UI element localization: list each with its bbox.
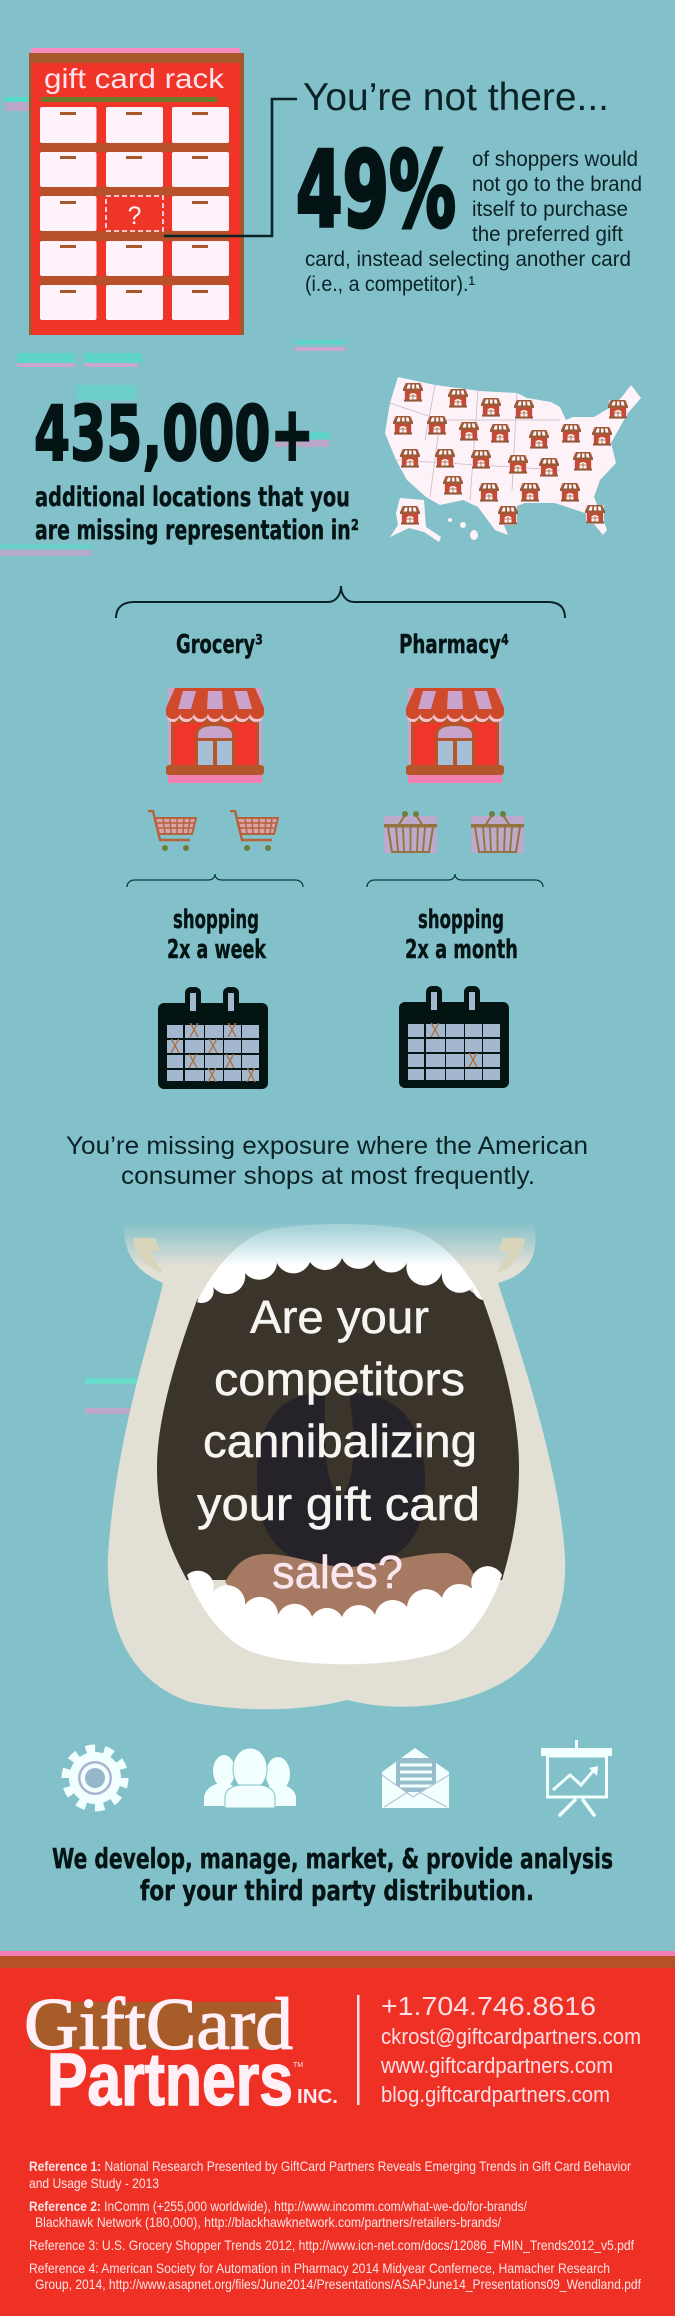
heading: you're not there: You’re not there... bbox=[303, 76, 609, 119]
references: Blackhawk Network (180,000), http://blackhawknetwork.com/partners/retailers-brands/ bbox=[35, 2214, 501, 2230]
text block: additional locations: are missing representation in² bbox=[35, 515, 359, 546]
icon: weekly calendar: X bbox=[246, 1065, 256, 1087]
text: shopping 2x a month: shopping bbox=[418, 905, 504, 935]
headline: cannibalizing question: cannibalizing bbox=[203, 1415, 477, 1467]
text block: shoppers statistic: not go to the brand bbox=[472, 173, 642, 196]
text block: additional locations: additional locations that you bbox=[35, 482, 350, 513]
logo: Partners bbox=[47, 2038, 293, 2121]
bracket: grocery and pharmacy bbox=[116, 586, 565, 618]
text block: shoppers statistic bbox=[305, 148, 642, 296]
bracket: grocery frequency bbox=[127, 874, 303, 887]
logo bbox=[24, 1984, 338, 2121]
panel: footer bbox=[0, 1951, 675, 2316]
text: shopping 2x a week: shopping bbox=[173, 905, 259, 935]
illustration: open mouth bbox=[108, 1222, 565, 1709]
logo: INC. bbox=[297, 2086, 338, 2108]
icon: monthly calendar: X bbox=[468, 1050, 478, 1072]
icon: weekly calendar bbox=[158, 987, 268, 1089]
icon: shopping baskets bbox=[384, 811, 524, 853]
icon: weekly calendar: X bbox=[208, 1036, 218, 1058]
text block: shoppers statistic: the preferred gift bbox=[472, 223, 623, 246]
icon: weekly calendar: X bbox=[189, 1020, 199, 1042]
contact details: ckrost@giftcardpartners.com bbox=[381, 2024, 641, 2049]
references bbox=[29, 2158, 641, 2292]
references: Reference 2: InComm (+255,000 worldwide), http://www.incomm.com/what-we-do/for-brands/ bbox=[29, 2198, 527, 2214]
heading: grocery: Grocery³ bbox=[176, 630, 263, 660]
map: United States with store icons bbox=[385, 377, 641, 542]
icon: weekly calendar: X bbox=[225, 1051, 235, 1073]
stat: 49%: 49% bbox=[296, 129, 456, 251]
text: services bbox=[52, 1842, 613, 1907]
missing card: ? bbox=[128, 202, 141, 230]
text block: shoppers statistic: (i.e., a competitor).¹ bbox=[305, 273, 475, 296]
headline: cannibalizing question: your gift card bbox=[197, 1478, 480, 1530]
icon: shopping carts bbox=[148, 811, 278, 851]
face bbox=[108, 1222, 565, 1709]
stat: 435,000+: 435,000+ bbox=[34, 389, 314, 478]
text: shopping 2x a week: 2x a week bbox=[167, 935, 266, 965]
icon: weekly calendar: X bbox=[227, 1020, 237, 1042]
headline: cannibalizing question: Are your bbox=[250, 1291, 429, 1343]
text block: shoppers statistic: itself to purchase bbox=[472, 198, 628, 221]
contact details: www.giftcardpartners.com bbox=[380, 2053, 613, 2078]
contact details bbox=[380, 1991, 641, 2107]
logo: TM bbox=[293, 2062, 303, 2069]
headline: cannibalizing question: sales? bbox=[272, 1546, 403, 1598]
text: missing exposure: You’re missing exposure where the American bbox=[66, 1132, 588, 1160]
rack cards bbox=[40, 107, 229, 320]
icon: monthly calendar bbox=[399, 986, 509, 1088]
text: missing exposure bbox=[66, 1132, 588, 1190]
icon: envelope bbox=[382, 1748, 449, 1808]
icon: weekly calendar: X bbox=[170, 1036, 180, 1058]
upper teeth bbox=[197, 1224, 483, 1303]
icon: gear bbox=[66, 1749, 124, 1807]
contact details: blog.giftcardpartners.com bbox=[381, 2082, 610, 2107]
text block: shoppers statistic: card, instead selecting another card bbox=[305, 248, 631, 271]
headline: cannibalizing question bbox=[197, 1291, 480, 1598]
text block: additional locations bbox=[35, 482, 359, 546]
references: and Usage Study - 2013 bbox=[29, 2175, 159, 2191]
bracket: pharmacy frequency bbox=[367, 874, 543, 887]
icon: weekly calendar: X bbox=[188, 1051, 198, 1073]
text: missing exposure: consumer shops at most frequently. bbox=[121, 1162, 535, 1190]
missing card bbox=[106, 196, 163, 231]
mouth interior bbox=[157, 1240, 519, 1580]
icon: presentation board bbox=[541, 1740, 612, 1815]
heading: pharmacy: Pharmacy⁴ bbox=[399, 630, 509, 660]
icon: people bbox=[204, 1748, 296, 1808]
tongue bbox=[225, 1553, 477, 1620]
text: services: for your third party distribution. bbox=[140, 1874, 534, 1907]
logo: GiftCard bbox=[24, 1984, 293, 2066]
text block: shoppers statistic: of shoppers would bbox=[472, 148, 638, 171]
lower teeth bbox=[187, 1566, 502, 1664]
icon: monthly calendar: X bbox=[430, 1020, 440, 1042]
icon: grocery store bbox=[166, 688, 264, 783]
ears bbox=[133, 1238, 525, 1273]
icon: pharmacy store bbox=[406, 688, 504, 783]
rack heading: gift card rack bbox=[44, 63, 225, 94]
text: shopping 2x a week bbox=[167, 905, 266, 965]
text: shopping 2x a month: 2x a month bbox=[405, 935, 518, 965]
icon: weekly calendar: X bbox=[207, 1065, 217, 1087]
throat bbox=[257, 1393, 425, 1567]
text: shopping 2x a month bbox=[405, 905, 518, 965]
headline: cannibalizing question: competitors bbox=[214, 1353, 465, 1405]
contact details: +1.704.746.8616 bbox=[381, 1991, 596, 2021]
connector line bbox=[164, 99, 297, 236]
panel: gift card rack bbox=[29, 48, 244, 335]
